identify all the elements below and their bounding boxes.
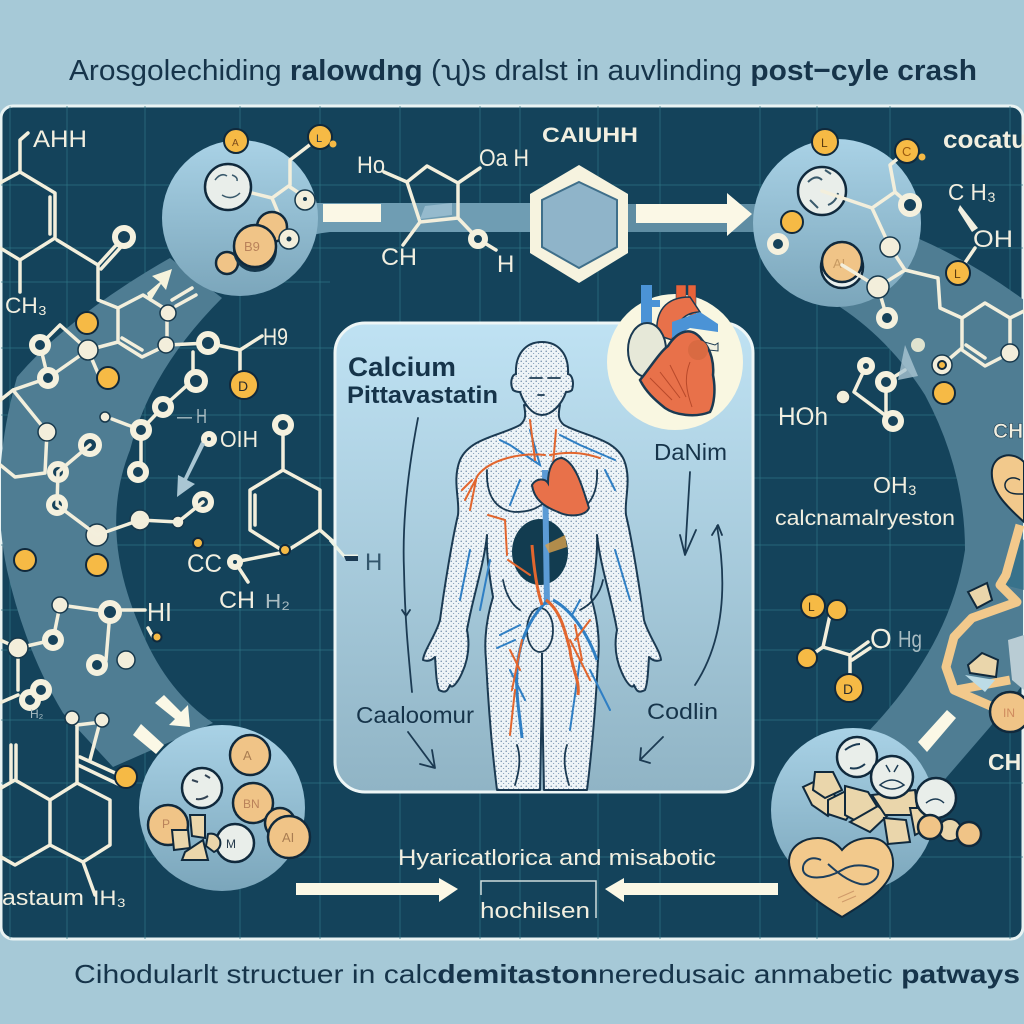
arrow: lower left <box>408 732 435 768</box>
molecule: HOh cluster <box>778 338 925 431</box>
molecule: lower right: D <box>843 681 853 697</box>
molecule: lower centre-left ring: CC <box>187 550 222 578</box>
circle: lower left pills <box>139 725 310 891</box>
molecule: top left: OIH <box>220 426 258 452</box>
yellow atoms <box>812 129 970 404</box>
molecule: centre top pentagon: CH <box>381 244 417 271</box>
panel label: lower right: Codlin <box>647 699 718 724</box>
label and small pointer: H at panel edge: H <box>365 549 382 576</box>
white tablets <box>837 737 877 777</box>
tan tablets <box>216 212 287 274</box>
blocks <box>803 772 932 844</box>
molecule: lower right <box>797 594 922 702</box>
heart and tan ring: far right: IN <box>1003 706 1015 720</box>
molecule: top right: OH <box>973 226 1013 253</box>
molecule: lower right: L <box>808 600 815 614</box>
heart and tan ring: far right <box>946 455 1024 775</box>
labels: cocatu <box>943 126 1024 154</box>
panel label: lower left: Caaloomur <box>356 702 474 728</box>
molecule: lower centre-left ring: CH <box>219 587 255 614</box>
molecule: lower left: astaum <box>2 885 84 910</box>
molecule: top right <box>812 126 1024 443</box>
circle: lower left pills: BN <box>243 797 260 811</box>
molecule: top left: CH₃ <box>5 293 47 318</box>
molecule: HOh cluster: HOh <box>778 403 828 431</box>
molecule: top left: — H <box>177 406 207 428</box>
yellow atoms <box>224 125 336 153</box>
arrows: into lower left circle <box>133 695 190 754</box>
atoms <box>867 196 1019 375</box>
heart in body <box>532 458 589 515</box>
molecule: top left <box>0 126 288 576</box>
tan tablet: AI <box>833 256 845 271</box>
molecule bonds <box>228 137 320 239</box>
molecule: centre top pentagon: Ho <box>357 152 385 179</box>
circle: top right pills <box>753 139 921 307</box>
yellow atoms: A <box>232 138 239 149</box>
yellow atoms: L <box>954 267 961 281</box>
footer: Cihodularlt structuer in calc demitaston neredusaic anmabetic patways <box>74 959 1020 989</box>
caption box: hochilsen: hochilsen <box>480 898 590 923</box>
organ: dark abdominal area <box>512 519 568 585</box>
icon: anatomical heart in circle <box>607 285 743 430</box>
cycle band: right <box>840 200 1024 785</box>
arrow: left molecule to top-left circle <box>147 269 172 302</box>
small atoms <box>770 211 803 252</box>
arrow: long left line <box>402 418 418 692</box>
heart and tan ring: far right: CH <box>988 749 1021 775</box>
heart icon: infinity <box>789 838 893 917</box>
cycle band: connector to right circle <box>620 204 760 232</box>
cycle band: left <box>0 258 222 767</box>
panel: human body <box>335 323 753 792</box>
molecule: lower centre-left ring: H₂ <box>265 591 290 613</box>
body figure <box>423 342 661 790</box>
caption: hyaricatlorica: Hyaricatlorica and misabotic <box>398 845 716 870</box>
molecule: centre top pentagon <box>357 145 529 278</box>
molecule: lower centre-left ring <box>187 417 345 614</box>
labels: AHH <box>33 126 87 153</box>
head <box>511 342 573 415</box>
yellow atoms: C <box>902 144 911 159</box>
atoms <box>32 228 217 546</box>
circle: lower left pills: AI <box>282 830 294 845</box>
label: calcnamalryeston: calcnamalryeston <box>775 507 955 530</box>
circle: lower left pills: P <box>162 817 170 831</box>
molecule: centre top pentagon: H <box>497 251 514 278</box>
yellow atoms <box>14 312 258 576</box>
molecule: top left: H9 <box>263 324 288 351</box>
caption box: hochilsen <box>480 881 596 923</box>
molecule: lower left: HI <box>147 597 172 627</box>
circle: top left pills <box>162 125 336 296</box>
molecule: top right: CH <box>993 420 1023 443</box>
tan rounds <box>918 815 981 846</box>
panel labels: Calcium <box>348 352 456 382</box>
lower ring bonds <box>57 445 203 535</box>
molecule: lower left: H₂ <box>30 707 44 721</box>
label: calcnamalryeston: OH₃ <box>873 472 917 498</box>
stripe: toward lower right circle <box>918 710 956 752</box>
yellow atoms: L <box>316 133 322 145</box>
molecule: lower left <box>0 597 172 910</box>
label: calcnamalryeston <box>775 472 955 530</box>
body contours <box>487 378 603 785</box>
tan tablet <box>821 242 863 288</box>
arrow: right downward <box>680 472 696 555</box>
molecule: lower left: IH₃ <box>93 887 126 910</box>
molecule: top right: C H₃ <box>948 179 996 205</box>
atoms <box>279 190 315 249</box>
circle: lower left pills: A <box>243 748 252 763</box>
connector stripe: left of pentagon <box>323 204 381 222</box>
molecule: lower right: Hg <box>898 626 922 652</box>
molecule: lower right: O <box>870 623 892 654</box>
panel label: top right: DaNim <box>654 439 727 465</box>
veins <box>460 420 630 738</box>
arrow: pale pointing to CC <box>177 442 205 497</box>
yellow atoms: D <box>238 378 248 394</box>
white tablet <box>798 167 846 215</box>
label and small pointer: H at panel edge <box>330 540 382 576</box>
cycle band: top connector <box>300 203 540 240</box>
tan tablets: B9 <box>244 239 260 254</box>
title: Arosgolechiding ralowdng (ʯ)s dralst in auvlinding post−cyle crash <box>69 55 977 87</box>
molecule: centre top pentagon: Oa H <box>479 145 529 172</box>
arrow: hexagon to right circle <box>636 193 752 236</box>
arrow: lower right <box>640 737 663 763</box>
panel label: drug name: Pittavastatin <box>347 382 498 409</box>
yellow atoms: L <box>821 136 828 150</box>
white tablet <box>205 164 251 210</box>
hexagon icon: CAIUHH <box>542 124 638 147</box>
circle: lower right pills <box>771 728 981 892</box>
arrow: right bottom <box>605 878 778 902</box>
circle: lower left pills: M <box>226 837 236 851</box>
hexagon icon <box>530 124 638 283</box>
arrow: left bottom <box>296 878 458 902</box>
arrow: right upward curve <box>695 525 722 685</box>
